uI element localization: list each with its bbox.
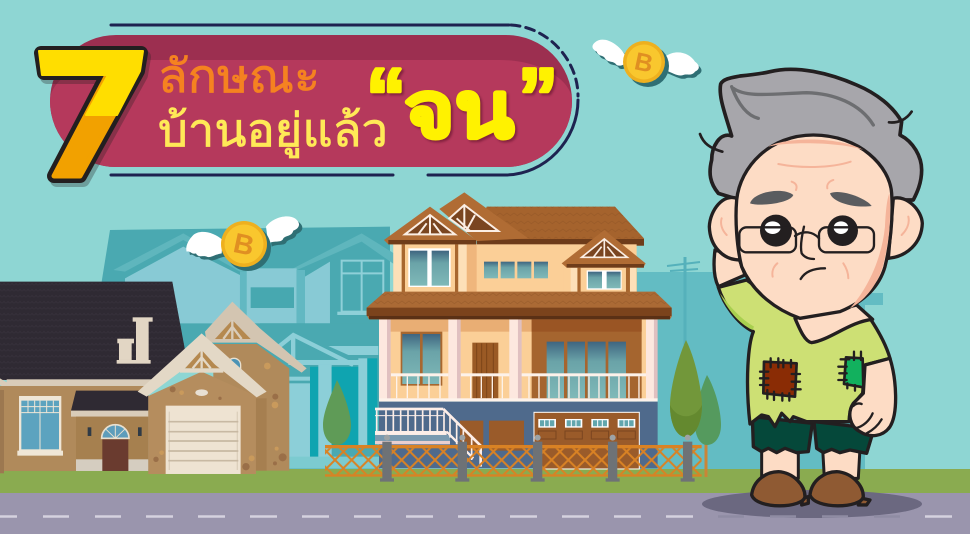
road dashes [0,515,952,518]
middle roof [367,292,672,319]
grass [0,469,970,493]
ears [709,197,922,260]
centre gable [439,192,528,241]
house: left brown house [0,282,307,474]
number seven [39,51,144,180]
eyes [760,215,858,247]
chimneys [117,317,153,364]
wrinkles [721,162,909,278]
roof [0,282,185,380]
hair [700,69,922,200]
back gable [205,302,307,471]
patch green [838,352,863,391]
garage front [138,333,267,474]
face [736,135,892,318]
heading quotes and poor: จน [404,66,514,154]
stair railing [375,408,481,467]
legs [762,448,860,478]
tree small left [323,380,351,445]
porch [71,391,148,471]
right arm [850,358,896,436]
old man head [700,69,922,318]
tree front right [670,340,702,437]
character shadow [702,490,922,518]
upper roof [477,207,644,246]
background teal skyline right [637,272,883,470]
left window [17,396,63,456]
glasses [739,227,874,252]
basement wall [379,402,658,468]
title banner [39,25,578,180]
background houses lower [260,323,382,470]
upper walls [393,244,637,294]
heading quotes and poor [366,52,558,154]
power pole [667,257,700,345]
mouth [801,268,825,279]
shoes [752,472,870,506]
patch brown [760,358,801,401]
heading line 2: บ้านอยู่แล้ว [158,104,388,158]
hand fingers [853,403,882,433]
heading quotes and poor: ” [518,52,558,141]
lower left window [401,332,442,386]
face shading [768,140,890,308]
garage [534,412,639,469]
upper windows [408,248,622,290]
banner pill [50,35,572,167]
banner outline [111,25,578,175]
eyebrows [750,191,872,207]
old man body [718,280,896,506]
right gable [562,230,646,268]
tree back right [695,375,721,477]
dashes under shadow [718,515,900,518]
heading line 1: ลักษณะ [158,50,320,102]
flying bitcoin upper [592,40,702,87]
road [0,493,970,534]
balcony railing [379,373,658,402]
shirt [718,280,890,427]
left gable [384,207,476,244]
raised hand [714,250,745,287]
door [472,343,498,398]
flying bitcoin lower [186,216,302,271]
sleeve trim [865,358,890,365]
background houses upper [102,227,397,350]
bitcoin symbol: B [231,227,257,262]
flying bitcoin upper: B [632,47,656,79]
heading quotes and poor: “ [366,52,406,141]
fence [325,435,702,482]
shorts [752,417,872,453]
right window [547,342,626,398]
wings [186,216,302,260]
nose [801,227,814,259]
columns [379,319,658,399]
main house [325,192,702,482]
lower walls [385,319,652,399]
